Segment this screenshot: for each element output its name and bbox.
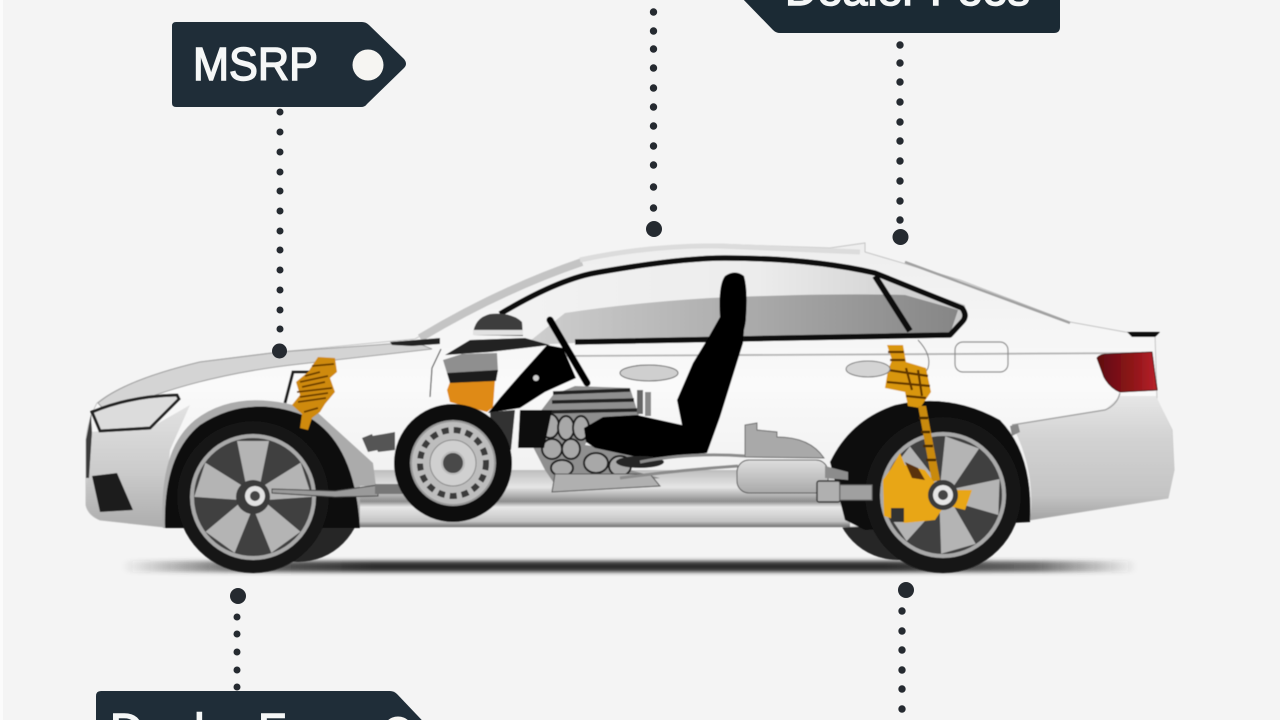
headlight (92, 395, 179, 431)
orange component (447, 380, 495, 412)
car body shell (86, 243, 1174, 527)
engine bay dark block (518, 410, 552, 448)
connector: bottom left tag to front wheel (230, 588, 246, 690)
tail light (1097, 352, 1157, 392)
connector: Dealer Fees tag to roof (892, 41, 908, 245)
car cutaway illustration (86, 243, 1174, 573)
driver seat (584, 272, 747, 468)
exhaust system (620, 423, 872, 502)
side windows (500, 258, 967, 345)
connector: MSRP tag to car hood (272, 108, 287, 358)
rear suspension spring and brake (883, 345, 972, 523)
front grille edge (86, 414, 92, 478)
connector: bottom right to rear wheel (898, 582, 914, 713)
rear wheel (865, 417, 1021, 573)
hood highlight band (98, 342, 432, 414)
ground shadow (122, 561, 1137, 572)
steering wheel and arm (488, 320, 587, 450)
rear wheel arch (830, 401, 1030, 530)
cabin headgear and dashboard (390, 314, 550, 383)
door handles (620, 361, 890, 381)
front wheel (177, 421, 329, 573)
tag: Dealer Fees (bottom) (96, 691, 436, 720)
body crease lines (420, 246, 1150, 425)
front wheel arch (162, 400, 376, 528)
tag: Dealer Fees (top) (739, 0, 1060, 33)
front axle shaft (272, 432, 410, 497)
front bumper (86, 405, 190, 527)
lower air vent (92, 473, 133, 512)
middle exposed wheel (394, 404, 512, 522)
rear quarter panel (1012, 396, 1174, 520)
connector: top centre to roof (646, 8, 662, 237)
tag: MSRP (172, 22, 406, 107)
front suspension spring (285, 357, 337, 430)
far-side tyres (234, 432, 962, 562)
tag: MSRP: MSRP (193, 38, 318, 90)
engine block (532, 386, 660, 492)
rear spoiler lip (1127, 332, 1160, 337)
sill and floor pan (360, 470, 850, 527)
fuel cap (955, 342, 1008, 372)
